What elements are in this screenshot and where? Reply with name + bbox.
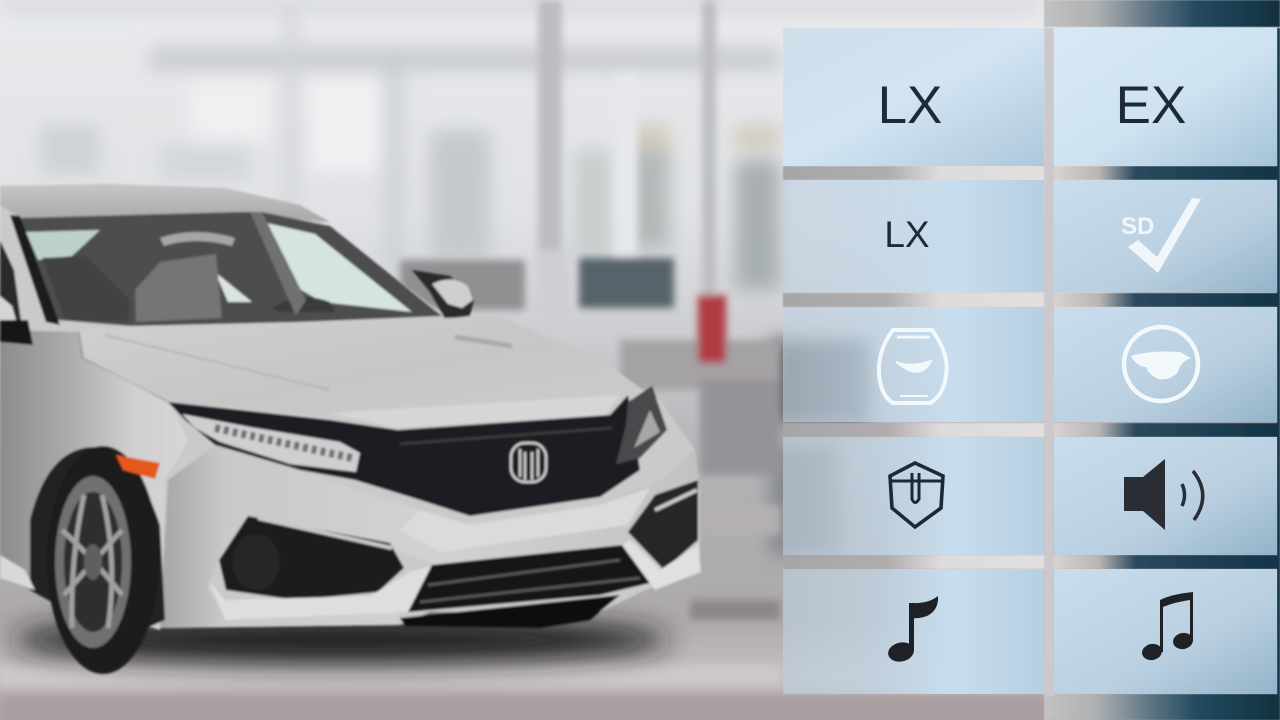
headlight right lens: [634, 410, 660, 448]
comparison grid: [783, 28, 1280, 720]
row separators: [783, 28, 1280, 720]
wheel arch: [30, 447, 165, 640]
headlight left: [182, 414, 360, 472]
emblem: [511, 443, 546, 482]
car ground shadow: [10, 616, 670, 664]
tile: shield icon: [783, 437, 1044, 555]
tile: steering wheel icon: [1054, 307, 1277, 422]
right lower lip: [622, 540, 701, 590]
hood crease: [105, 335, 330, 390]
tile: LX header: [783, 28, 1044, 166]
black grille band: [168, 395, 640, 516]
tile: EX header: [1054, 28, 1277, 166]
tile: double note icon: [1054, 569, 1277, 694]
grille bars: [420, 560, 640, 602]
roof: [0, 184, 330, 222]
icon: check mark: [1121, 198, 1201, 273]
A pillar: [250, 212, 306, 316]
fog lamp: [232, 534, 280, 590]
bumper bright centre: [400, 488, 650, 552]
top right dark corner band: [1044, 0, 1280, 27]
side window: [0, 240, 24, 342]
side mirror: [0, 320, 33, 345]
fog trim: [258, 518, 392, 548]
seats: [135, 254, 222, 322]
lower corner trim: [208, 566, 432, 620]
rearview mirror: [160, 232, 235, 246]
side window reflection: [0, 296, 16, 320]
tile: check mark icon: [1054, 180, 1277, 292]
orange side marker: [116, 455, 160, 479]
left seat: [42, 256, 130, 322]
windshield glass: left: [26, 230, 100, 260]
windshield: [20, 212, 442, 326]
icon: shield: [890, 463, 943, 527]
icon: rounded cabin outline: [879, 330, 947, 403]
door and fender panel: [0, 330, 188, 630]
tile: seat icon: [783, 307, 1044, 422]
tile: single note icon: [783, 569, 1044, 694]
icon: double music note: [1141, 592, 1194, 662]
right intake trim: [655, 490, 697, 510]
icon: steering wheel: [1124, 327, 1198, 401]
windshield glass: right: [262, 222, 412, 312]
car body silhouette: [0, 184, 700, 628]
upper grille trim: [330, 395, 620, 428]
bumper: [160, 445, 700, 628]
right intake: [628, 480, 698, 570]
tile: LX header: LX: [878, 76, 942, 135]
door mirror right: [412, 270, 474, 319]
hood vent: [455, 337, 512, 346]
icon: check mark: SD: [1121, 213, 1154, 240]
icon: speaker: [1124, 459, 1203, 530]
fog light housing: [219, 516, 404, 600]
tile: speaker icon: [1054, 437, 1277, 555]
under chin: [400, 595, 620, 628]
left pillar: [10, 215, 60, 325]
hood: [80, 317, 638, 415]
steering wheel and dash: [272, 297, 335, 312]
seat glimpse: [215, 272, 252, 302]
tile: LX trim label: LX: [884, 214, 930, 255]
grille slat: [400, 428, 612, 444]
headlight LED detail: [215, 428, 352, 458]
car: silver Honda Civic front: [0, 184, 701, 674]
rocker: [0, 555, 35, 590]
tile: LX trim label: [783, 180, 1044, 292]
fender body line: [78, 332, 168, 402]
icon: music note: [886, 596, 938, 664]
wheel: [47, 446, 159, 674]
headlight right: [616, 386, 667, 464]
lower grille: [408, 545, 650, 612]
tile: EX header: EX: [1116, 76, 1186, 135]
